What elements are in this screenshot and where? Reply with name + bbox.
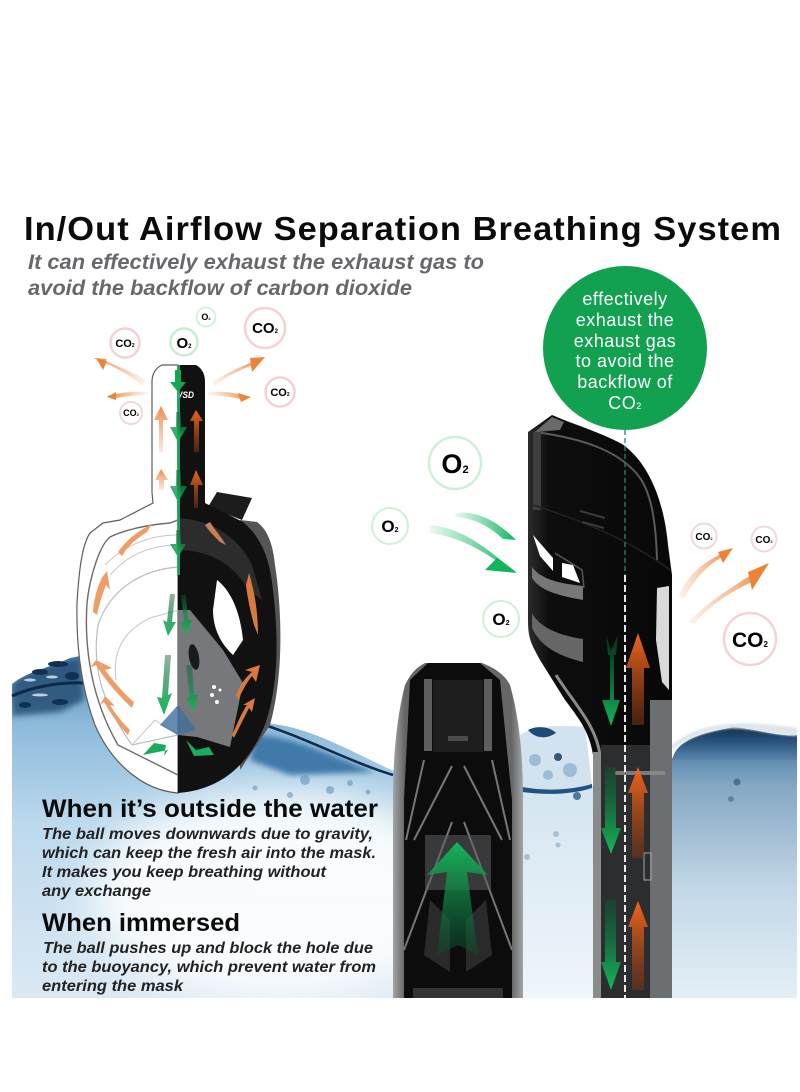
left lens sketch	[105, 535, 178, 745]
water: right	[672, 723, 797, 998]
bubbles: CO2 top left: CO2	[252, 320, 279, 337]
top window	[433, 680, 483, 752]
bubbles: O2 right panel: O2	[381, 517, 399, 536]
nose hole	[187, 643, 201, 671]
white dashed line	[624, 575, 626, 998]
callout: green circle: CO2	[608, 393, 642, 413]
text block: when immersed: When immersed	[42, 909, 240, 937]
orange mask arrows	[90, 522, 260, 738]
left half outline	[77, 365, 178, 793]
lower dark section	[601, 745, 650, 998]
left highlight	[533, 432, 541, 510]
lower gray band	[532, 613, 583, 662]
side window	[656, 586, 669, 690]
translucent band	[178, 518, 262, 600]
gray outer shell	[240, 520, 280, 770]
bubbles: CO2 top left	[110, 308, 294, 424]
subtitle	[28, 251, 484, 300]
callout: green circle: exhaust gas	[574, 331, 676, 351]
callout: green circle: backflow of	[577, 372, 673, 392]
tube body	[528, 415, 672, 998]
window frame	[555, 553, 584, 588]
bubbles: O2 right panel	[372, 437, 519, 637]
green dashed line	[624, 430, 626, 575]
outflow arrows left	[93, 358, 148, 400]
text block: when immersed: The ball pushes up and block the hole due	[43, 940, 373, 957]
small label	[448, 736, 468, 741]
text block: when immersed	[42, 909, 376, 995]
upper window	[533, 535, 553, 571]
bubbles: O2 top left: O2	[201, 312, 211, 322]
lower gray section	[650, 700, 672, 998]
gray lens	[178, 610, 243, 747]
green arrows	[143, 370, 214, 756]
second window	[562, 563, 580, 583]
seam	[533, 505, 670, 570]
outer shell	[393, 663, 523, 998]
black interior	[404, 663, 512, 998]
callout: green circle: effectively	[582, 289, 668, 309]
top highlight	[535, 417, 564, 432]
callout: green circle: to avoid the	[575, 351, 675, 371]
bubbles: CO2 right panel: CO2	[732, 629, 769, 652]
callout: green circle: exhaust the	[576, 310, 674, 330]
text block: outside the water	[42, 795, 378, 900]
strap	[208, 492, 252, 520]
bubbles: O2 top left	[170, 308, 216, 356]
lower chevrons	[404, 822, 512, 950]
divider dash marks	[615, 771, 665, 775]
bubbles: O2 top left: O2	[176, 335, 192, 352]
bubbles: CO2 right panel: CO2	[755, 535, 773, 546]
lower left edge	[593, 752, 601, 998]
panel: front mask cross-section	[77, 357, 280, 793]
vent slot	[580, 511, 605, 528]
water: left	[11, 656, 394, 998]
subtitle: avoid the backflow of carbon dioxide	[28, 277, 412, 300]
text block: outside the water: any exchange	[42, 883, 151, 900]
bubbles: CO2 right panel	[692, 524, 776, 665]
bubbles: CO2 right panel: CO2	[695, 532, 713, 543]
inner hole	[213, 580, 243, 655]
text block: outside the water: When it’s outside the water	[42, 795, 378, 823]
panel: side view of snorkel tube	[528, 415, 672, 998]
tube logo: VSD	[177, 390, 194, 400]
text block: when immersed: entering the mask	[42, 978, 184, 995]
bubbles: CO2 top left: CO2	[123, 408, 140, 418]
upper gray band	[532, 567, 583, 600]
bubbles: O2 right panel: O2	[492, 610, 510, 629]
arrows: O2 inflow	[430, 513, 517, 573]
lower left highlight curve	[556, 675, 600, 755]
left inner dark contour	[86, 520, 178, 775]
arrows: CO2 outflow	[678, 548, 769, 624]
clip	[644, 853, 651, 880]
logo dots	[210, 685, 222, 704]
green tube arrows	[601, 635, 621, 990]
subtitle: It can effectively exhaust the exhaust gas to	[28, 251, 484, 274]
water: middle	[520, 726, 595, 998]
big green arrow	[427, 842, 488, 955]
outflow arrows right	[208, 357, 265, 402]
text block: when immersed: to the buoyancy, which prevent water from	[42, 959, 376, 976]
glass reflection	[425, 835, 491, 890]
left inner gray contour	[96, 567, 178, 745]
bubbles: CO2 top left: CO2	[115, 338, 135, 350]
water showing through chin	[160, 705, 196, 735]
orange tube arrows	[154, 406, 203, 508]
callout: green circle	[543, 266, 707, 430]
panel: mask valve close-up	[393, 663, 523, 998]
curved highlight	[535, 432, 657, 560]
orange tube arrows	[626, 633, 650, 990]
upper chevrons	[406, 760, 510, 840]
right half body	[178, 365, 277, 793]
title: In/Out Airflow Separation Breathing System	[24, 210, 782, 247]
bubbles: CO2 top left: CO2	[270, 387, 290, 399]
text block: outside the water: The ball moves downwards due to gravity,	[42, 826, 373, 843]
bubbles: O2 right panel: O2	[441, 449, 469, 479]
green centre line	[177, 365, 180, 575]
text block: outside the water: which can keep the fresh air into the mask.	[42, 845, 376, 862]
bottom strip	[413, 988, 503, 998]
text block: outside the water: It makes you keep breathing without	[42, 864, 327, 881]
bottom pads	[424, 900, 492, 972]
